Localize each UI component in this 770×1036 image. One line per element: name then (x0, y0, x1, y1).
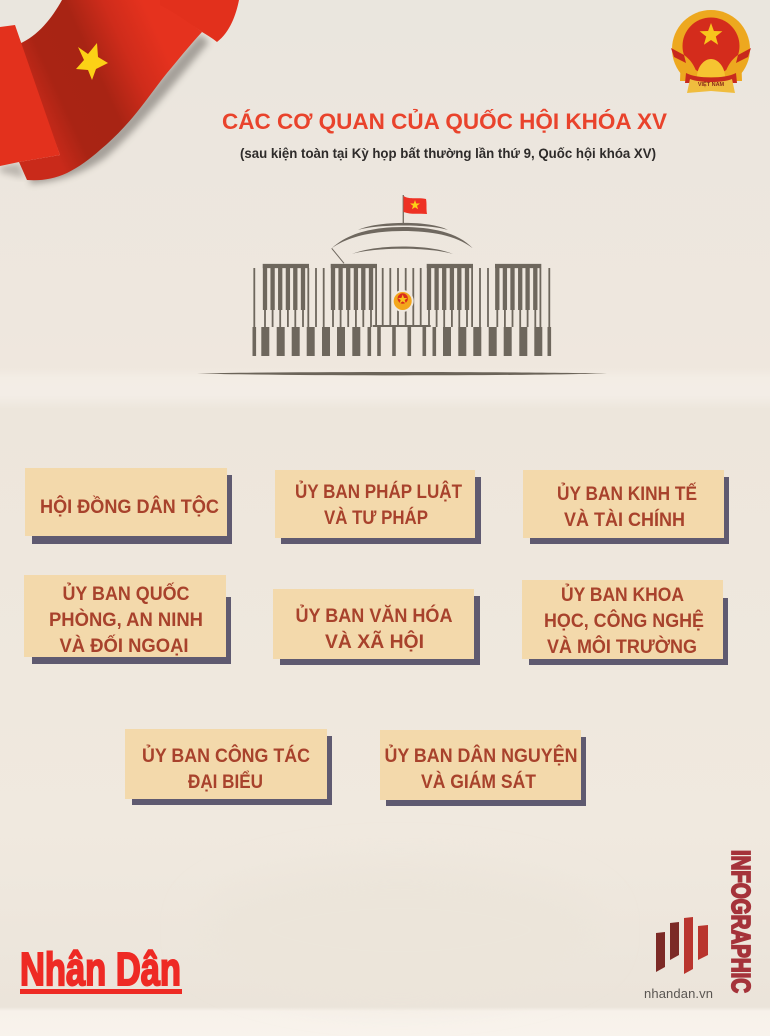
card: Ủy ban Quốc phòng, An ninh và Đối ngoại: VÀ ĐỐI NGOẠI (60, 633, 188, 657)
vertical label: INFOGRAPHIC: INFOGRAPHIC (726, 850, 756, 993)
card: Ủy ban Quốc phòng, An ninh và Đối ngoại (24, 575, 231, 664)
subtitle: (sau kiện toàn tại Kỳ họp bất thường lần thứ 9, Quốc hội khóa XV) (240, 145, 656, 161)
card: Ủy ban Công tác đại biểu (125, 729, 332, 805)
card: Hội đồng Dân tộc (25, 468, 232, 544)
card: Ủy ban Kinh tế và Tài chính: ỦY BAN KINH TẾ (557, 481, 697, 505)
card: Ủy ban Kinh tế và Tài chính: VÀ TÀI CHÍNH (564, 508, 685, 531)
logo: Nhân Dân: Nhân Dân (20, 943, 181, 995)
card: Ủy ban Văn hóa và Xã hội: VÀ XÃ HỘI (325, 629, 424, 653)
ground line (197, 372, 607, 375)
card: Ủy ban Dân nguyện và Giám sát (380, 730, 586, 806)
dome (332, 223, 473, 263)
card: Ủy ban Công tác đại biểu: ĐẠI BIỂU (188, 770, 263, 793)
card: Ủy ban Khoa học, Công nghệ và Môi trường: ỦY BAN KHOA (561, 582, 684, 606)
card: Ủy ban Quốc phòng, An ninh và Đối ngoại: PHÒNG, AN NINH (49, 607, 203, 631)
star on flag (76, 43, 108, 80)
logo: nhandan.vn bars (644, 917, 713, 1001)
card: Ủy ban Khoa học, Công nghệ và Môi trường: VÀ MÔI TRƯỜNG (547, 634, 697, 658)
watermark: faint building (200, 865, 600, 995)
card: Ủy ban Công tác đại biểu: ỦY BAN CÔNG TÁC (142, 743, 310, 767)
card: Ủy ban Khoa học, Công nghệ và Môi trường: HỌC, CÔNG NGHỆ (544, 608, 704, 632)
national emblem (671, 10, 751, 93)
card: Ủy ban Pháp luật và Tư pháp: ỦY BAN PHÁP LUẬT (295, 479, 462, 503)
card: Ủy ban Văn hóa và Xã hội: ỦY BAN VĂN HÓA (296, 603, 452, 627)
card: Ủy ban Dân nguyện và Giám sát: ỦY BAN DÂN NGUYỆN (384, 743, 578, 767)
card: Ủy ban Khoa học, Công nghệ và Môi trường (522, 580, 728, 665)
colonnade (254, 266, 549, 356)
logo: nhandan.vn bars: nhandan.vn (644, 986, 713, 1001)
ribbon flag (0, 0, 239, 184)
card: Ủy ban Pháp luật và Tư pháp (275, 470, 481, 544)
card: Hội đồng Dân tộc: HỘI ĐỒNG DÂN TỘC (40, 494, 219, 518)
title: CÁC CƠ QUAN CỦA QUỐC HỘI KHÓA XV (222, 108, 667, 134)
small emblem (392, 290, 414, 312)
illustration: National Assembly building (197, 195, 607, 375)
card: Ủy ban Văn hóa và Xã hội (273, 589, 480, 665)
national emblem: VIỆT NAM (698, 80, 725, 88)
card: Ủy ban Pháp luật và Tư pháp: VÀ TƯ PHÁP (324, 506, 428, 529)
flag on roof (403, 195, 427, 224)
card: Ủy ban Quốc phòng, An ninh và Đối ngoại: ỦY BAN QUỐC (62, 581, 190, 605)
card: Ủy ban Kinh tế và Tài chính (523, 470, 729, 544)
card: Ủy ban Dân nguyện và Giám sát: VÀ GIÁM SÁT (421, 770, 536, 793)
